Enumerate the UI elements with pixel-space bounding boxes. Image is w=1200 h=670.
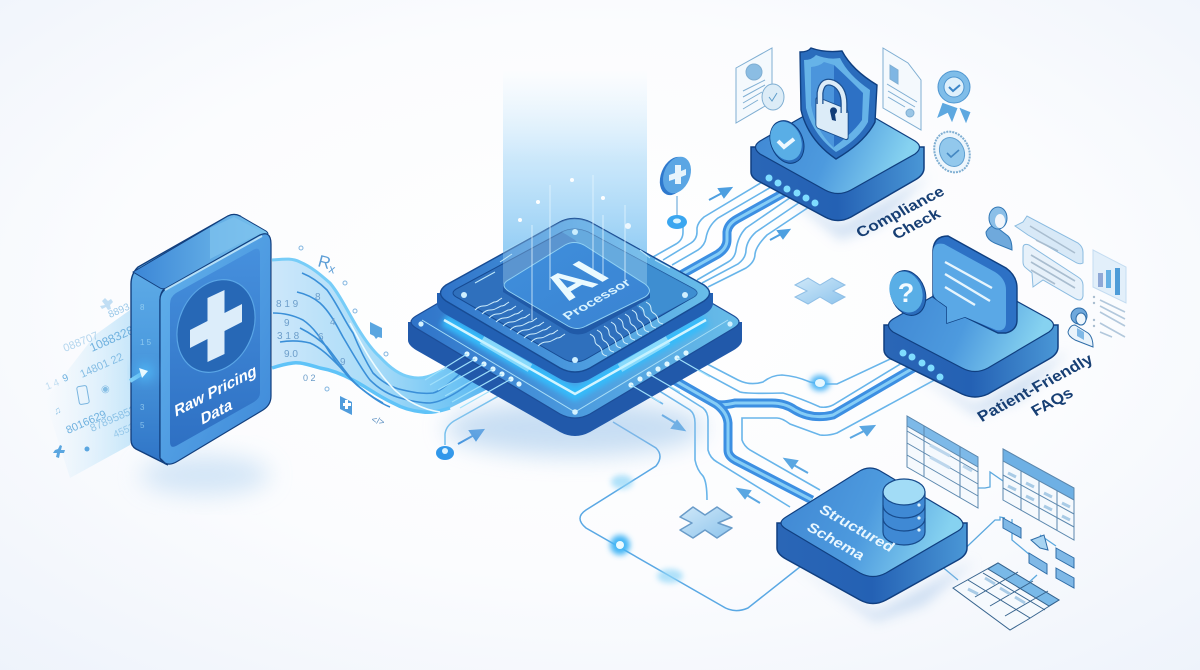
left side data glyphs: 8 xyxy=(140,303,145,312)
icon: patient xyxy=(986,207,1012,250)
top die xyxy=(504,242,650,328)
text lines xyxy=(1093,296,1125,337)
table: ground xyxy=(953,563,1059,630)
icon: question badge xyxy=(884,266,932,320)
mid layer side xyxy=(437,293,713,383)
base layer xyxy=(408,322,742,436)
icon: plus tag xyxy=(340,396,352,415)
lines: chip to compliance xyxy=(653,178,815,287)
panel: structured schema xyxy=(777,468,975,622)
label: raw pricing data: Data xyxy=(200,395,234,429)
traces xyxy=(475,250,670,356)
panel: incoming raw data sheet: 878958533 xyxy=(88,401,144,435)
port dots xyxy=(900,350,944,380)
platform xyxy=(777,523,967,604)
icon: seal badge xyxy=(928,126,976,178)
light beam above AI processor xyxy=(503,70,647,295)
panel: incoming raw data sheet: 1088328 xyxy=(88,323,136,355)
data stream ribbon to AI processor: 0 2 xyxy=(303,373,316,383)
card top face xyxy=(133,214,268,289)
card: raw pricing data xyxy=(130,214,271,495)
data stream ribbon to AI processor xyxy=(272,246,500,427)
lines: schema to data diagrams xyxy=(933,472,1056,585)
text: Rx symbol: x xyxy=(327,261,337,277)
panel: incoming raw data sheet: ◉ xyxy=(101,384,110,395)
icon: check badge xyxy=(764,116,810,168)
glow arrow into card xyxy=(130,373,143,381)
card shadow xyxy=(140,455,270,495)
icon: question badge: ? xyxy=(898,278,914,308)
icon: chat chip xyxy=(370,322,382,339)
icon: speech bubble xyxy=(933,236,1017,333)
label: compliance check: Compliance xyxy=(853,184,948,241)
data stream ribbon to AI processor: 6 xyxy=(318,332,324,343)
icon: database cylinder xyxy=(883,479,925,545)
label: Processor: Processor xyxy=(559,276,634,322)
data stream ribbon to AI processor: 9.0 xyxy=(284,349,298,360)
glowing node markers xyxy=(436,215,830,583)
lines: chip to schema xyxy=(660,372,812,500)
panel: incoming raw data sheet: 8893 xyxy=(107,301,132,321)
icon: shield with padlock xyxy=(800,48,877,159)
card left side xyxy=(131,214,240,465)
mid layer top xyxy=(440,218,710,372)
platform shadow xyxy=(900,350,1070,415)
label: patient-friendly FAQs: Patient-Friendly xyxy=(974,351,1096,425)
flow diagram boxes xyxy=(1003,518,1074,588)
line: lower loop xyxy=(580,422,815,611)
panel: incoming raw data sheet: 14801 22 xyxy=(78,351,125,381)
table: right xyxy=(1003,449,1074,540)
line: left node xyxy=(445,384,520,445)
left side data glyphs xyxy=(140,303,152,430)
label: structured schema: Schema xyxy=(803,520,868,564)
icon: floating cross top xyxy=(795,278,845,304)
icon: document left xyxy=(736,48,784,123)
icon: medical cross circle xyxy=(163,267,269,385)
data stream ribbon to AI processor: 3 1 8 xyxy=(277,331,300,342)
panel: incoming raw data sheet: 4553 xyxy=(112,421,137,441)
left side data glyphs: 1 5 xyxy=(140,338,152,347)
left side data glyphs: 5 xyxy=(140,421,145,430)
lines: chip to FAQs xyxy=(660,363,922,417)
icon: doctor xyxy=(1068,308,1093,347)
panel: incoming raw data sheet: 9 xyxy=(61,372,71,385)
top die side xyxy=(503,285,650,334)
icon: speech outlines xyxy=(1015,216,1083,300)
platform shadow xyxy=(790,560,975,622)
platform shadow xyxy=(770,175,930,240)
panel: incoming raw data sheet: 088707 xyxy=(62,330,100,355)
panel: patient-friendly FAQs xyxy=(884,207,1126,425)
left side data glyphs: 3 xyxy=(140,403,145,412)
label: structured schema: Structured xyxy=(816,502,898,555)
icon: document right xyxy=(883,48,921,130)
chip shadow xyxy=(445,400,705,456)
text: code tag: </> xyxy=(370,414,386,427)
port dots xyxy=(766,174,818,206)
icon: bar chart sheet xyxy=(1093,250,1126,303)
arrows xyxy=(458,188,874,503)
beam over the chip's rear half xyxy=(503,218,647,291)
data stream ribbon to AI processor: 8 xyxy=(315,292,321,303)
panel: incoming raw data sheet xyxy=(44,298,144,478)
data stream ribbon to AI processor: 9 xyxy=(284,318,290,329)
icon: floating cross bottom xyxy=(680,507,732,538)
icon: plus bubble xyxy=(654,153,696,199)
panel: incoming raw data sheet: 1 4 xyxy=(44,377,61,393)
port dots xyxy=(464,350,689,388)
line: plus icon node xyxy=(676,196,678,222)
data stream ribbon to AI processor: 8 1 9 xyxy=(276,299,299,310)
panel: incoming raw data sheet: 8016629 xyxy=(64,408,108,437)
platform xyxy=(751,147,924,220)
panel: compliance check xyxy=(736,48,976,243)
inner recess xyxy=(453,229,697,362)
panel: incoming raw data sheet: ♫ xyxy=(52,405,63,418)
icon: ribbon badge xyxy=(938,71,970,122)
label: raw pricing data: Raw Pricing xyxy=(174,361,257,421)
panel: AI processor xyxy=(408,175,742,456)
label: compliance check: Check xyxy=(890,206,944,243)
connector lines xyxy=(445,178,1056,611)
label: AI: AI xyxy=(529,254,621,307)
platform xyxy=(884,325,1058,397)
card front face xyxy=(160,234,271,464)
data stream ribbon to AI processor: 9 xyxy=(340,357,346,368)
beam sparks xyxy=(518,175,631,320)
label: patient-friendly FAQs: FAQs xyxy=(1028,385,1077,420)
data stream ribbon to AI processor: 4 xyxy=(330,317,336,328)
glow strip xyxy=(444,320,706,394)
table: left xyxy=(907,416,978,508)
text: Rx symbol: R xyxy=(316,252,333,273)
